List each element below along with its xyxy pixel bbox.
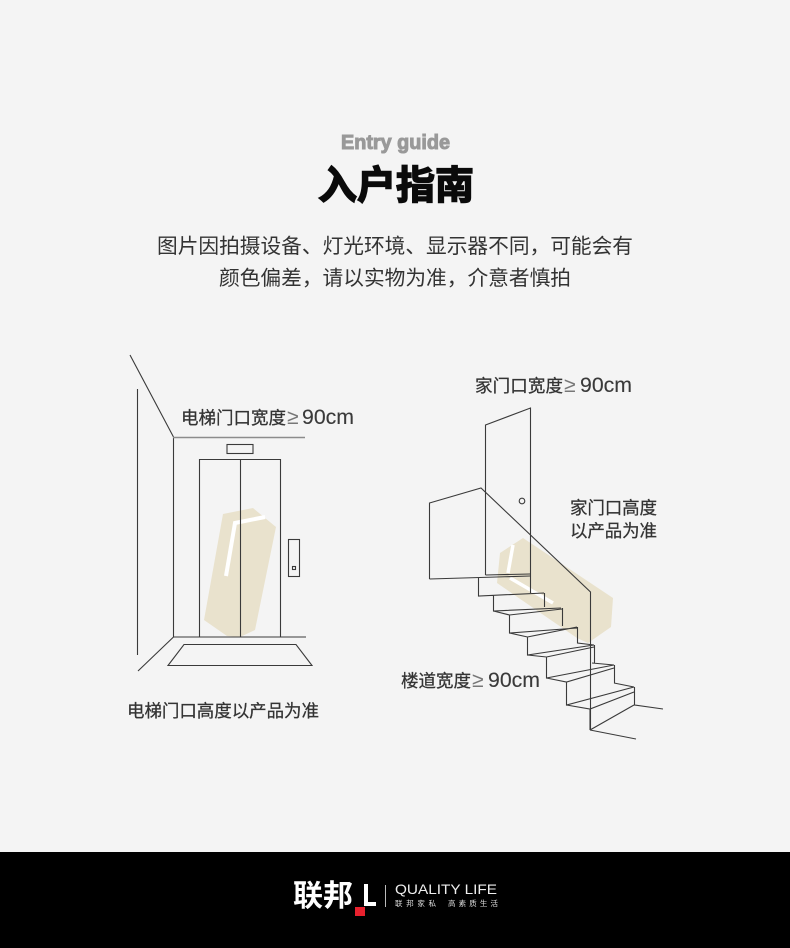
highlight: white sofa edge on stairs [508,545,553,603]
door [486,408,530,576]
label: stair width value: 90cm [488,669,540,692]
highlight: sofa silhouette in elevator [204,508,276,637]
label: home door height: 以产品为准 [570,521,657,541]
floor mat [168,644,312,666]
label: home door width value: ≥ [564,374,576,397]
diagram: elevator [130,355,312,671]
elevator doors [200,460,280,637]
tagline: QUALITY LIFE [395,881,497,897]
logo divider [385,885,386,907]
label: home door width: 家门口宽度 [475,376,563,396]
tagline chinese: 联邦家私 [395,898,436,908]
label: home door width value: 90cm [580,374,632,397]
landing wall and handrail [430,488,590,730]
footer band [0,852,790,948]
label: elevator door width: 电梯门口宽度 [181,408,286,428]
elevator call panel [288,540,300,576]
logo wordmark: 联邦 [293,880,353,913]
highlight: white sofa edge in elevator [226,517,265,576]
tagline chinese: 高素质生活 [448,898,498,908]
description text [157,235,633,290]
label: stair width: 楼道宽度 [401,671,471,691]
door knob [519,498,525,504]
description text: 图片因拍摄设备、灯光环境、显示器不同，可能会有 [157,235,633,258]
label: home door height: 家门口高度 [570,498,657,518]
title: 入户指南 [318,165,474,208]
description text: 颜色偏差，请以实物为准，介意者慎拍 [219,267,571,290]
highlight: sofa silhouette on stairs [497,538,613,643]
label: elevator door width value: 90cm [302,406,354,429]
elevator sign [227,444,253,454]
label: stair width value: ≥ [472,669,484,692]
elevator walls and floor [130,355,306,671]
logo mark [355,884,376,916]
diagram: staircase [430,408,663,739]
stair steps [478,576,663,739]
subtitle: Entry guide: Entry guide [341,132,450,154]
tagline chinese [395,898,498,908]
label: elevator door width value: ≥ [287,406,299,429]
label: elevator door height: 电梯门口高度以产品为准 [127,701,319,721]
label: home door height [570,498,657,541]
